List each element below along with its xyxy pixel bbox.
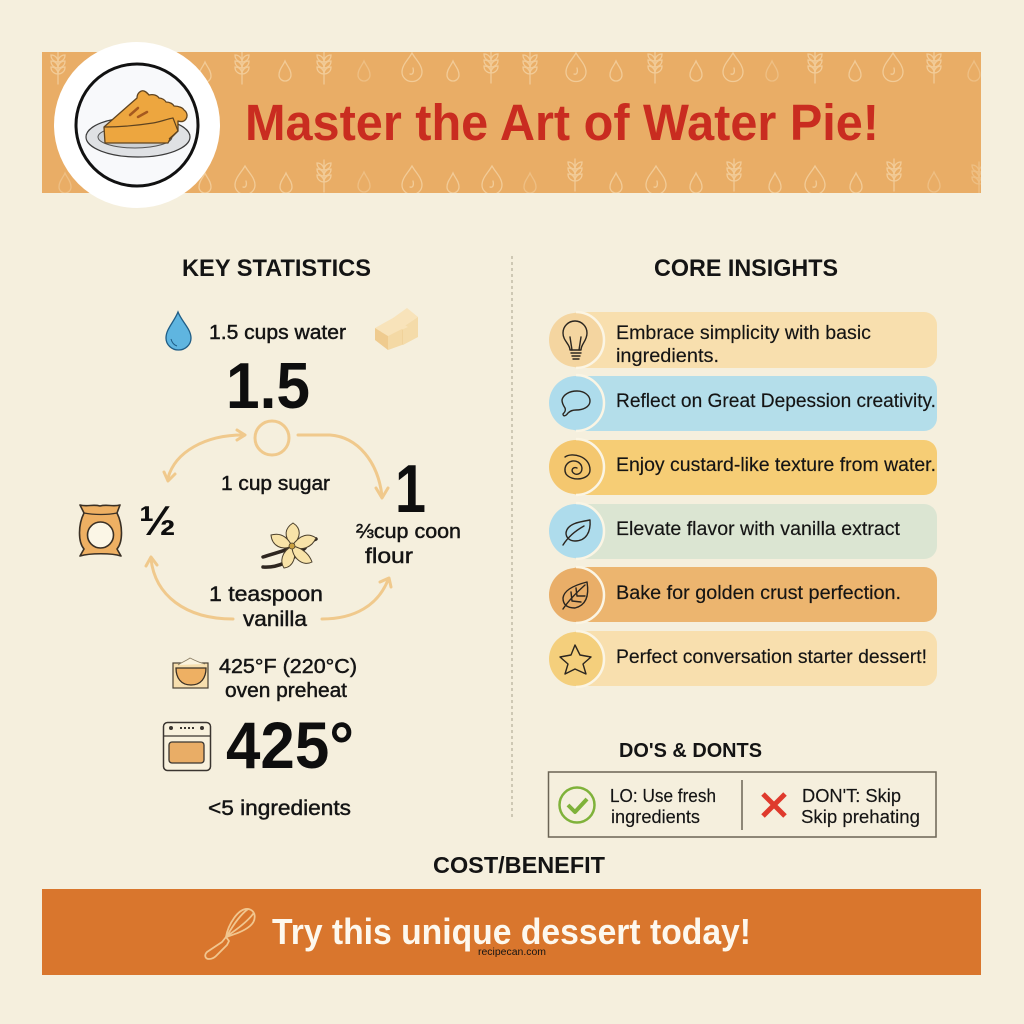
stat label: vanilla <box>209 583 323 631</box>
stat label: water: 1.5 cups water <box>209 322 346 344</box>
stat value: 1.5: 1.5 <box>226 349 310 422</box>
insight 5: crust <box>549 567 937 623</box>
stat value: one half: ½ <box>139 497 176 544</box>
stat label: oven temperature <box>219 656 357 702</box>
do text: LO: Use fresh <box>610 786 716 806</box>
icon: flour bag <box>80 505 122 556</box>
insight 2: history: Reflect on Great Depession creativity. <box>616 391 936 412</box>
don't text: DON'T: Skip <box>802 786 901 806</box>
don't text: Skip prehating <box>801 807 920 827</box>
icon: mixing bowl <box>173 658 208 688</box>
stat label: vanilla: 1 teaspoon <box>209 583 323 606</box>
stat label: coconut flour: flour <box>365 545 413 568</box>
heading: do's and don'ts: DO'S & DONTS <box>619 740 762 762</box>
insight 3: texture: Enjoy custard-like texture from water. <box>616 455 936 476</box>
header banner <box>42 51 986 194</box>
insight 2: history <box>549 375 937 431</box>
stat value: 425 degrees: 425° <box>226 708 354 782</box>
insight 4: flavor: Elevate flavor with vanilla extract <box>616 519 901 540</box>
icon: pie slice badge <box>54 42 220 208</box>
icon: sugar cube <box>375 308 418 350</box>
icon: water drop <box>166 312 191 350</box>
stat label: vanilla: vanilla <box>243 608 307 631</box>
don't text <box>801 786 920 827</box>
stat label: oven temperature: oven preheat <box>225 680 347 702</box>
do text <box>610 786 716 827</box>
icon: vanilla flower <box>263 523 316 568</box>
icon: red cross <box>763 794 785 816</box>
stat label: sugar: 1 cup sugar <box>221 473 330 495</box>
call to action text: Try this unique dessert today! <box>272 911 751 952</box>
panel: key statistics <box>80 308 461 820</box>
insight 5: crust: Bake for golden crust perfection. <box>616 583 901 604</box>
heading: core insights: CORE INSIGHTS <box>654 255 838 282</box>
call to action banner <box>42 889 981 975</box>
watermark: recipecan.com <box>478 947 546 958</box>
icon: whisk <box>205 909 255 959</box>
stat label: coconut flour: ⅔cup coon <box>356 521 461 543</box>
insight 1: simplicity: Embrace simplicity with basic <box>616 323 871 344</box>
icon: oven <box>164 722 210 770</box>
stat label: oven temperature: 425°F (220°C) <box>219 656 357 678</box>
banner pattern: wheat and drops <box>51 51 986 194</box>
insight 6: conversation: Perfect conversation starter dessert! <box>616 647 927 668</box>
do text: ingredients <box>611 807 700 827</box>
panel: do's and don'ts <box>548 772 936 837</box>
stat value: 1: 1 <box>395 451 426 527</box>
title: Master the Art of Water Pie! <box>245 94 879 151</box>
insight 3: texture <box>549 439 937 495</box>
insight 1: simplicity <box>549 312 937 368</box>
panel: core insights <box>549 312 937 687</box>
cycle diagram arrows <box>146 421 391 619</box>
column divider <box>511 256 513 820</box>
insight 4: flavor <box>549 503 937 559</box>
heading: key statistics: KEY STATISTICS <box>182 255 371 282</box>
stat label: coconut flour <box>356 521 461 568</box>
stat label: ingredient count: <5 ingredients <box>208 797 351 820</box>
icon: check mark <box>560 788 594 822</box>
insight 6: conversation <box>549 631 937 687</box>
insight 1: simplicity: ingredients. <box>616 346 719 367</box>
heading: cost/benefit: COST/BENEFIT <box>433 852 605 878</box>
